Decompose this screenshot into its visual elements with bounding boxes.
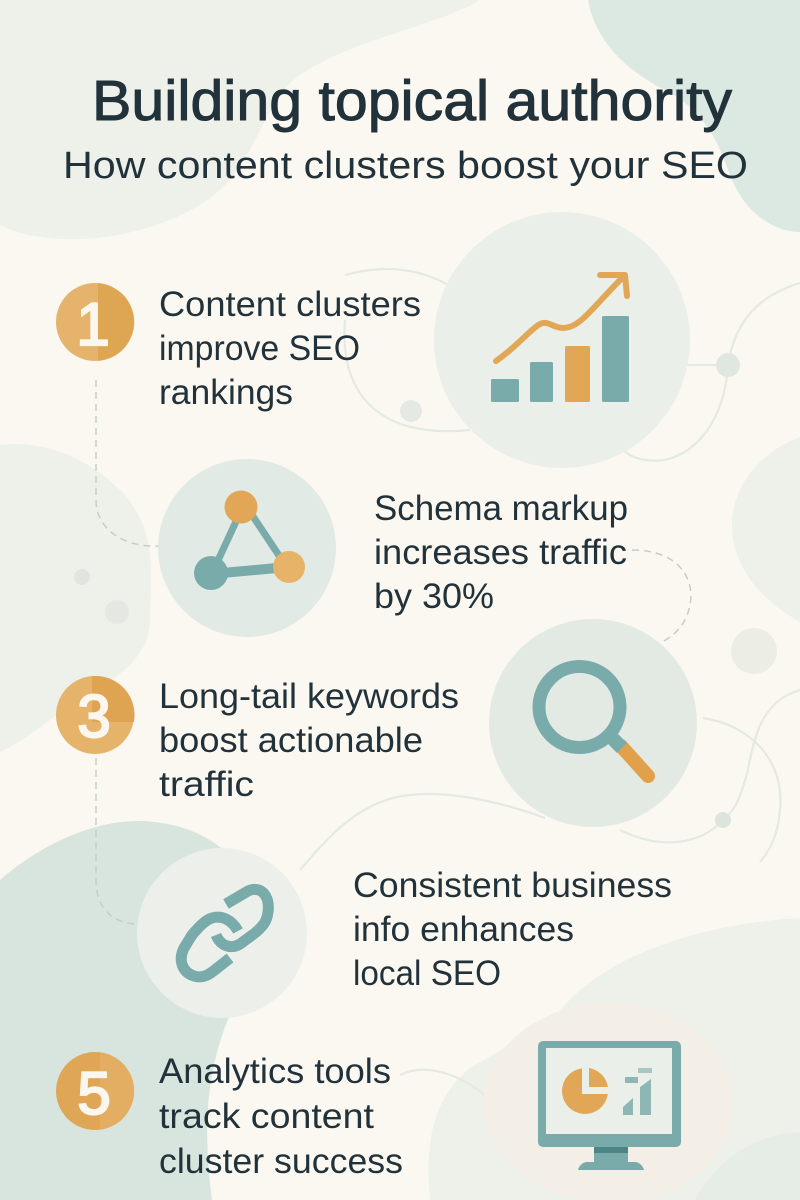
step 5: [56, 1003, 734, 1200]
text: step 4: local SEO: [353, 954, 501, 993]
icon: chain link: [137, 848, 307, 1018]
text: step 5: cluster success: [159, 1142, 403, 1181]
step 1: [56, 212, 690, 468]
text: step 5: Analytics tools: [159, 1052, 391, 1091]
badge 1: [56, 283, 134, 361]
badge 5: 5: [77, 1060, 111, 1127]
text: step 3: Long-tail keywords: [159, 677, 459, 716]
text: step 3: boost actionable: [159, 721, 423, 760]
text: step 4: [353, 866, 672, 993]
text: step 2: Schema markup: [374, 489, 628, 528]
badge 3: 3: [77, 683, 111, 750]
text: step 4: info enhances: [353, 910, 574, 949]
text: step 2: [374, 489, 628, 616]
text: step 1: Content clusters: [159, 285, 421, 324]
text: step 5: track content: [159, 1097, 374, 1136]
icon: magnifying glass: [489, 619, 697, 827]
text: step 1: improve SEO: [159, 329, 360, 368]
step 4: [137, 848, 672, 1018]
icon: network triangle: [158, 459, 336, 637]
text: step 1: [159, 285, 421, 412]
subtitle: How content clusters boost your SEO: [63, 145, 748, 187]
text: step 3: traffic: [159, 765, 254, 804]
badge 3: [56, 676, 135, 754]
title: Building topical authority: [92, 69, 733, 133]
text: step 1: rankings: [159, 373, 293, 412]
text: step 5: [159, 1052, 403, 1181]
text: step 4: Consistent business: [353, 866, 672, 905]
badge 5: [56, 1052, 134, 1130]
text: step 3: [159, 677, 459, 804]
step 3: [56, 619, 697, 827]
badge 1: 1: [76, 291, 110, 358]
step 2: [158, 459, 628, 637]
text: step 2: increases traffic: [374, 533, 627, 572]
icon: growth chart: [434, 212, 690, 468]
text: step 2: by 30%: [374, 577, 494, 616]
icon: analytics monitor: [484, 1003, 734, 1200]
